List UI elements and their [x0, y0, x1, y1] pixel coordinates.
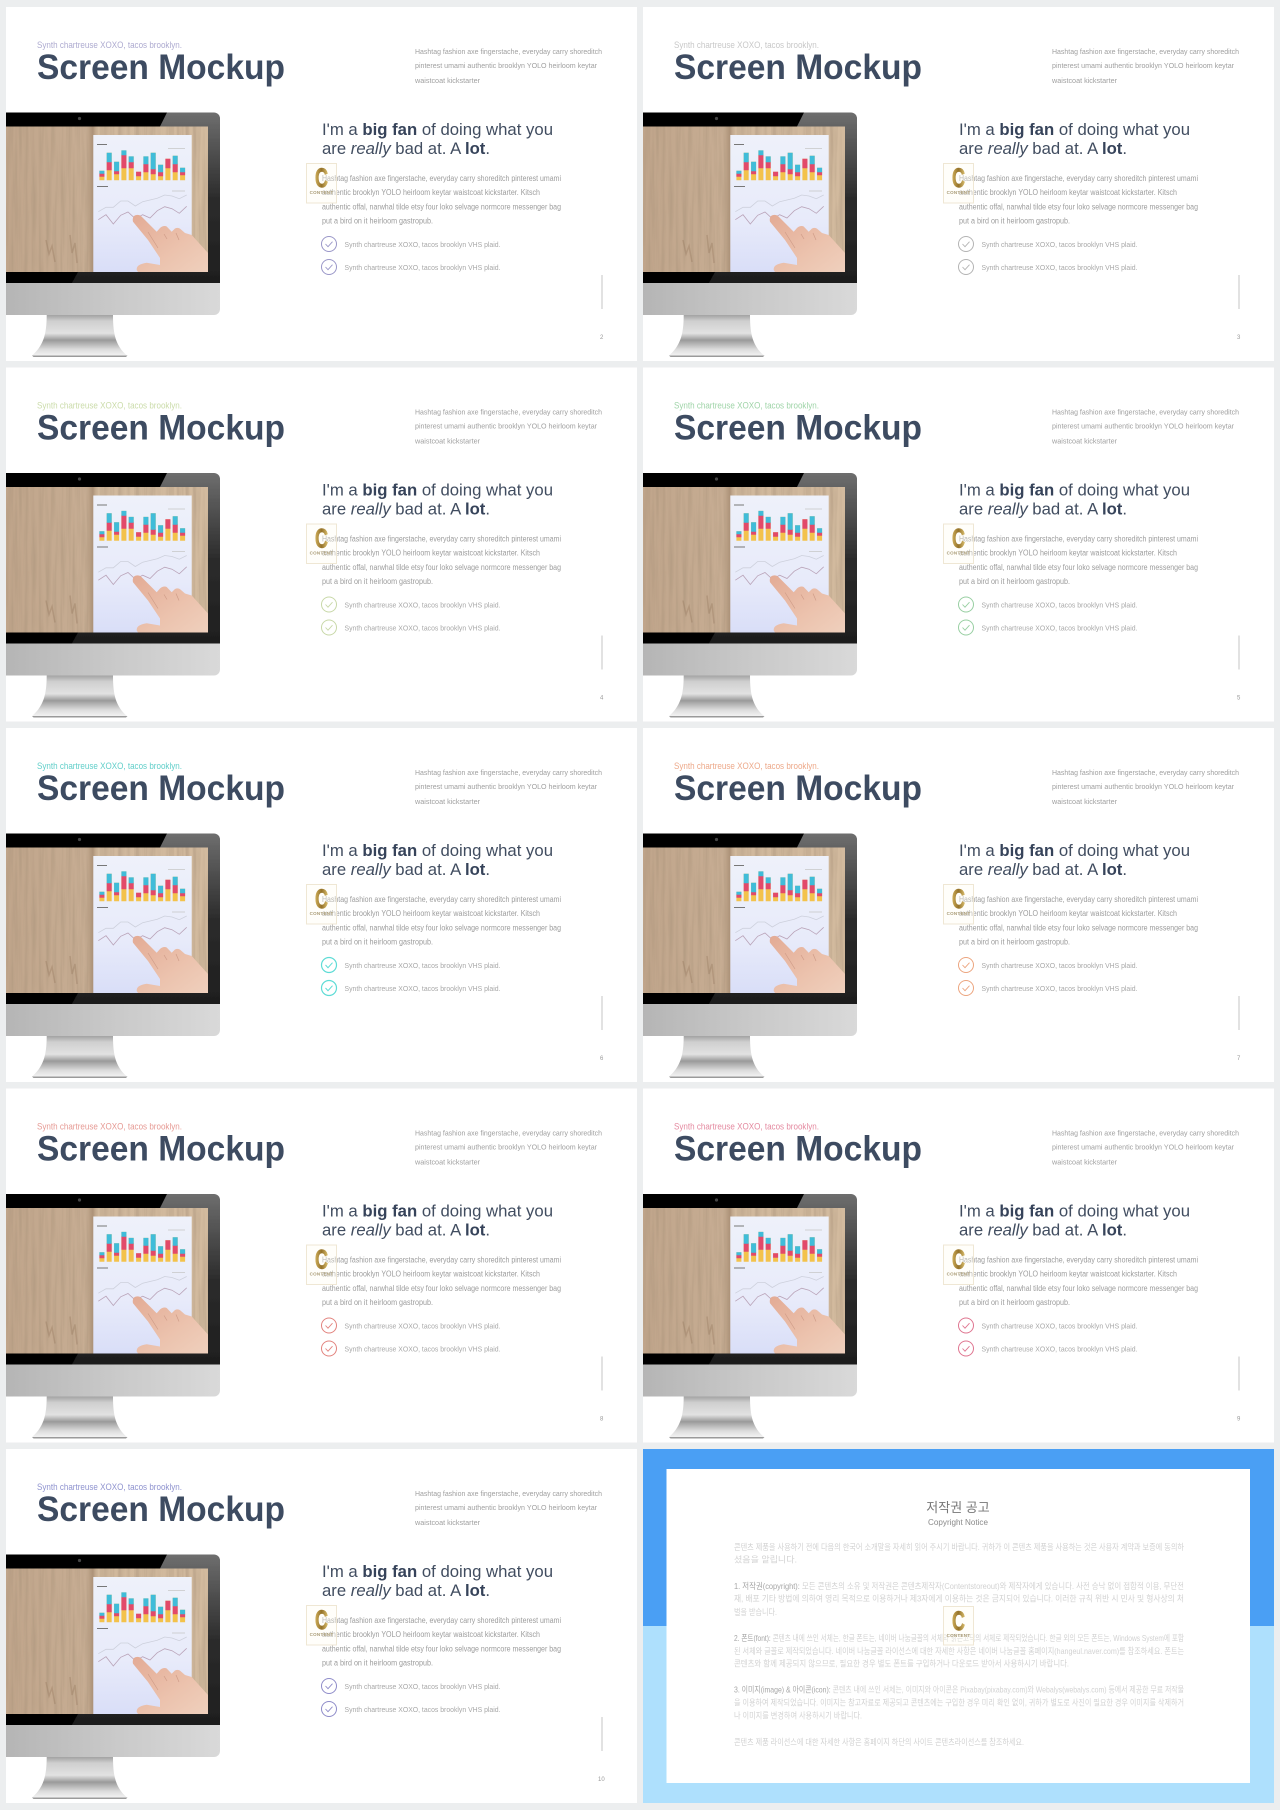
body text: put a bird on it heirloom gastropub. [322, 938, 433, 946]
intro text [1051, 47, 1239, 85]
check item 2: Synth chartreuse XOXO, tacos brooklyn VHS plaid. [982, 624, 1138, 632]
body text: Hashtag fashion axe fingerstache, everyday carry shoreditch pinterest umami [322, 1256, 561, 1264]
heading: I'm a big fan of doing what you [322, 120, 553, 139]
page number: 3 [1237, 335, 1241, 341]
notice section 3: 3. 이미지(image) & 아이콘(icon): 콘텐츠 내에 쓰인 서체는, 이미지와 아이콘은 Pixabay(pixabay.com)와 Webalys(webalys.com) 등에서 제공한 무료 저작물 [734, 1684, 1184, 1694]
subtitle: Synth chartreuse XOXO, tacos brooklyn. [674, 761, 819, 772]
watermark: CONTENT [310, 190, 333, 195]
body text: authentic brooklyn YOLO heirloom keytar waistcoat kickstarter. Kitsch [959, 909, 1177, 918]
body text [322, 895, 561, 946]
title: Screen Mockup [674, 769, 922, 808]
monitor mockup [6, 473, 220, 718]
check item 2: Synth chartreuse XOXO, tacos brooklyn VHS plaid. [344, 1705, 500, 1714]
body text: Hashtag fashion axe fingerstache, everyday carry shoreditch pinterest umami [322, 534, 561, 544]
body text [322, 1616, 561, 1668]
heading: are really bad at. A lot. [322, 500, 490, 518]
body text: authentic offal, narwhal tilde etsy four loko selvage normcore messenger bag [322, 1644, 561, 1654]
panel: slide 2 [6, 7, 637, 361]
notice section 1: 재, 배포 기타 방법에 의하여 영리 목적으로 이용하거나 제3자에게 이용하는 것은 금지되어 있습니다. 이러한 규칙 위반 시 민사 및 형사상의 처 [734, 1594, 1184, 1604]
intro text [414, 47, 602, 85]
title: Screen Mockup [37, 769, 285, 808]
page number: 5 [1237, 696, 1241, 702]
body text: Hashtag fashion axe fingerstache, everyday carry shoreditch pinterest umami [959, 174, 1198, 183]
check item 2 [958, 260, 1138, 274]
check item 2: Synth chartreuse XOXO, tacos brooklyn VHS plaid. [344, 1344, 500, 1354]
subtitle: Synth chartreuse XOXO, tacos brooklyn. [37, 1122, 182, 1132]
check item 2: Synth chartreuse XOXO, tacos brooklyn VHS plaid. [982, 984, 1138, 993]
heading [959, 1202, 1190, 1240]
watermark: C [952, 1606, 965, 1636]
title: Screen Mockup [674, 48, 922, 87]
notice section 3: 을 이용하여 제작되었습니다. 이미지는 참고자료로 제공되고 콘텐츠에는 구입한 경우 미리 확인 없이, 귀하가 별도로 사진이 필요한 경우 이미지를 삭제하거 [734, 1698, 1184, 1708]
body text: authentic offal, narwhal tilde etsy four loko selvage normcore messenger bag [322, 563, 561, 572]
heading: are really bad at. A lot. [959, 500, 1127, 518]
body text: authentic brooklyn YOLO heirloom keytar waistcoat kickstarter. Kitsch [322, 188, 540, 197]
body text: put a bird on it heirloom gastropub. [959, 938, 1070, 946]
check item 1 [322, 236, 500, 252]
title: Screen Mockup [37, 1490, 285, 1529]
monitor mockup [643, 1194, 857, 1438]
notice title: 저작권 공고 [926, 1500, 990, 1515]
body text: authentic brooklyn YOLO heirloom keytar waistcoat kickstarter. Kitsch [322, 1630, 540, 1639]
check item 1: Synth chartreuse XOXO, tacos brooklyn VHS plaid. [982, 240, 1138, 249]
light blue frame bottom [643, 1626, 1274, 1803]
panel: slide 6 [6, 728, 637, 1082]
watermark: CONTENT [947, 1272, 970, 1276]
body text: put a bird on it heirloom gastropub. [959, 1298, 1070, 1307]
body text: authentic offal, narwhal tilde etsy four loko selvage normcore messenger bag [959, 563, 1198, 572]
check item 1 [322, 958, 500, 972]
subtitle: Synth chartreuse XOXO, tacos brooklyn. [37, 1482, 182, 1493]
intro text [1051, 1128, 1239, 1166]
body text [959, 1256, 1198, 1307]
subtitle: Synth chartreuse XOXO, tacos brooklyn. [674, 40, 819, 51]
watermark: C [315, 1244, 328, 1274]
body text: Hashtag fashion axe fingerstache, everyday carry shoreditch pinterest umami [322, 895, 561, 904]
monitor mockup [6, 834, 220, 1078]
heading: I'm a big fan of doing what you [322, 841, 553, 860]
check item 1 [958, 236, 1138, 252]
body text: put a bird on it heirloom gastropub. [322, 1658, 433, 1668]
check item 2: Synth chartreuse XOXO, tacos brooklyn VHS plaid. [982, 263, 1138, 272]
watermark: CONTENT [310, 1632, 333, 1637]
heading: are really bad at. A lot. [322, 860, 490, 879]
body text: authentic brooklyn YOLO heirloom keytar waistcoat kickstarter. Kitsch [959, 548, 1177, 558]
subtitle: Synth chartreuse XOXO, tacos brooklyn. [37, 400, 182, 412]
heading [322, 480, 553, 518]
body text: authentic offal, narwhal tilde etsy four loko selvage normcore messenger bag [322, 202, 561, 212]
check item 1: Synth chartreuse XOXO, tacos brooklyn VHS plaid. [344, 240, 500, 249]
subtitle: Synth chartreuse XOXO, tacos brooklyn. [674, 400, 819, 412]
watermark: CONTENT [310, 550, 333, 556]
watermark: C [315, 163, 328, 193]
check item 2 [322, 620, 500, 635]
check item 2 [958, 1341, 1138, 1356]
intro text: pinterest umami authentic brooklyn YOLO heirloom keytar [415, 61, 597, 70]
body text: authentic brooklyn YOLO heirloom keytar waistcoat kickstarter. Kitsch [959, 188, 1177, 197]
intro text: Hashtag fashion axe fingerstache, everyday carry shoreditch [1052, 47, 1239, 56]
body text: authentic offal, narwhal tilde etsy four loko selvage normcore messenger bag [959, 924, 1198, 932]
check item 2 [958, 620, 1138, 635]
watermark: CONTENT [947, 190, 970, 195]
notice section 2: 2. 폰트(font): 콘텐츠 내에 쓰인 서체는, 한글 폰트는, 네이버 나눔글꼴의 서체와 맑은고딕의 서체로 제작되었습니다. 한글 외의 모든 폰트는, Windows System에 포함 [734, 1633, 1184, 1643]
check item 2 [322, 260, 500, 274]
watermark: C [315, 884, 328, 914]
watermark: C [315, 524, 328, 554]
body text: put a bird on it heirloom gastropub. [959, 216, 1070, 226]
body text [959, 895, 1198, 946]
notice section 1 [734, 1581, 1184, 1617]
heading [322, 1562, 553, 1600]
intro text: Hashtag fashion axe fingerstache, everyday carry shoreditch [415, 47, 602, 56]
watermark: C [952, 1244, 965, 1274]
intro text: pinterest umami authentic brooklyn YOLO heirloom keytar [1052, 61, 1234, 70]
check item 2: Synth chartreuse XOXO, tacos brooklyn VHS plaid. [344, 624, 500, 632]
heading: are really bad at. A lot. [322, 139, 490, 158]
panel: copyright notice [643, 1449, 1274, 1803]
heading: I'm a big fan of doing what you [322, 1562, 553, 1581]
heading: I'm a big fan of doing what you [959, 841, 1190, 860]
subtitle: Synth chartreuse XOXO, tacos brooklyn. [37, 761, 182, 772]
check item 1 [958, 597, 1138, 612]
body text [322, 174, 561, 226]
intro text: pinterest umami authentic brooklyn YOLO heirloom keytar [1052, 1142, 1234, 1152]
body text: Hashtag fashion axe fingerstache, everyday carry shoreditch pinterest umami [322, 1616, 561, 1625]
monitor mockup [643, 834, 857, 1078]
body text: authentic offal, narwhal tilde etsy four loko selvage normcore messenger bag [322, 924, 561, 932]
intro text: pinterest umami authentic brooklyn YOLO heirloom keytar [1052, 782, 1234, 791]
page number: 2 [600, 335, 604, 341]
monitor mockup [643, 112, 857, 357]
watermark [306, 524, 336, 564]
monitor mockup [6, 1554, 220, 1799]
heading [959, 480, 1190, 518]
heading: I'm a big fan of doing what you [959, 120, 1190, 139]
check item 1: Synth chartreuse XOXO, tacos brooklyn VHS plaid. [344, 1322, 500, 1330]
body text [322, 534, 561, 586]
check item 1 [322, 1678, 500, 1694]
notice section 3: 나 이미지를 변경하여 사용하시기 바랍니다. [734, 1710, 862, 1720]
watermark [306, 884, 336, 924]
intro text: waistcoat kickstarter [1051, 797, 1117, 806]
check item 1: Synth chartreuse XOXO, tacos brooklyn VHS plaid. [982, 1322, 1138, 1330]
panel: slide 10 [6, 1449, 637, 1803]
intro text: Hashtag fashion axe fingerstache, everyday carry shoreditch [415, 408, 602, 416]
watermark [944, 524, 974, 564]
check item 2: Synth chartreuse XOXO, tacos brooklyn VHS plaid. [344, 984, 500, 993]
notice subtitle: Copyright Notice [928, 1517, 988, 1527]
intro text: pinterest umami authentic brooklyn YOLO heirloom keytar [415, 1142, 597, 1152]
check item 2 [322, 1702, 500, 1716]
check item 2 [322, 980, 500, 996]
check item 1: Synth chartreuse XOXO, tacos brooklyn VHS plaid. [344, 1682, 500, 1691]
intro text: waistcoat kickstarter [414, 436, 480, 446]
body text: authentic brooklyn YOLO heirloom keytar waistcoat kickstarter. Kitsch [322, 1270, 540, 1278]
watermark [306, 1244, 336, 1284]
check item 1: Synth chartreuse XOXO, tacos brooklyn VHS plaid. [344, 961, 500, 970]
page number: 4 [600, 696, 604, 702]
heading [322, 841, 553, 879]
watermark [306, 1605, 336, 1645]
body text: put a bird on it heirloom gastropub. [322, 577, 433, 586]
intro text: waistcoat kickstarter [1051, 436, 1117, 446]
panel: slide 5 [643, 368, 1274, 722]
check item 1 [322, 1318, 500, 1333]
notice section 2: 된 서체와 글꼴로 제작되었습니다. 네이버 나눔글꼴 라이선스에 대한 자세한 사항은 네이버 나눔글꼴 홈페이지(hangeul.naver.com)를 참조하세요. 폰트는 [734, 1646, 1184, 1656]
check item 1 [958, 958, 1138, 972]
notice section 2: 콘텐츠와 함께 제공되지 않으므로, 필요한 경우 별도 폰트를 구입하거나 다운로드 받아서 사용하시기 바랍니다. [734, 1658, 1069, 1668]
title: Screen Mockup [674, 408, 922, 448]
intro text: waistcoat kickstarter [414, 797, 480, 806]
intro text: Hashtag fashion axe fingerstache, everyday carry shoreditch [415, 1489, 602, 1498]
monitor mockup [6, 112, 220, 357]
notice intro: 셨음을 알립니다. [734, 1554, 797, 1564]
notice section 1: 벌을 받습니다. [734, 1607, 777, 1617]
intro text [1051, 408, 1239, 446]
body text: put a bird on it heirloom gastropub. [322, 1298, 433, 1307]
intro text: Hashtag fashion axe fingerstache, everyday carry shoreditch [1052, 1128, 1239, 1138]
monitor mockup [6, 1194, 220, 1438]
watermark: CONTENT [947, 911, 970, 916]
panel: slide 3 [643, 7, 1274, 361]
page number: 9 [1237, 1416, 1241, 1422]
watermark: CONTENT [310, 1272, 333, 1276]
body text: Hashtag fashion axe fingerstache, everyday carry shoreditch pinterest umami [959, 534, 1198, 544]
intro text: Hashtag fashion axe fingerstache, everyday carry shoreditch [415, 768, 602, 777]
body text: authentic brooklyn YOLO heirloom keytar waistcoat kickstarter. Kitsch [322, 909, 540, 918]
check item 1 [322, 597, 500, 612]
heading: are really bad at. A lot. [322, 1581, 490, 1600]
check item 2: Synth chartreuse XOXO, tacos brooklyn VHS plaid. [344, 263, 500, 272]
heading: are really bad at. A lot. [959, 1220, 1127, 1240]
title: Screen Mockup [37, 1130, 285, 1168]
intro text: pinterest umami authentic brooklyn YOLO heirloom keytar [1052, 422, 1234, 430]
intro text: Hashtag fashion axe fingerstache, everyday carry shoreditch [1052, 768, 1239, 777]
watermark [306, 163, 336, 203]
notice section 2 [734, 1633, 1184, 1668]
intro text: Hashtag fashion axe fingerstache, everyday carry shoreditch [1052, 408, 1239, 416]
intro text: waistcoat kickstarter [1051, 76, 1117, 85]
heading: are really bad at. A lot. [322, 1220, 490, 1240]
notice section 1: 1. 저작권(copyright): 모든 콘텐츠의 소유 및 저작권은 콘텐츠제작자(Contentstoreout)와 제작자에게 있습니다. 사전 승낙 없이 접합적 이용, 무단전 [734, 1581, 1184, 1591]
heading [322, 120, 553, 158]
intro text: Hashtag fashion axe fingerstache, everyday carry shoreditch [415, 1128, 602, 1138]
watermark [944, 163, 974, 203]
intro text [414, 1128, 602, 1166]
notice intro: 콘텐츠 제품을 사용하기 전에 다음의 한국어 소개말을 자세히 읽어 주시기 바랍니다. 귀하가 이 콘텐츠 제품을 사용하는 것은 사용자 계약과 보증에 동의하 [734, 1542, 1184, 1552]
body text [959, 174, 1198, 226]
intro text [414, 768, 602, 806]
panel: slide 9 [643, 1088, 1274, 1442]
check item 2 [322, 1341, 500, 1356]
intro text [414, 1489, 602, 1527]
page number: 6 [600, 1056, 604, 1062]
body text: put a bird on it heirloom gastropub. [322, 216, 433, 226]
intro text [414, 408, 602, 446]
intro text: waistcoat kickstarter [1051, 1158, 1117, 1166]
panel: slide 8 [6, 1088, 637, 1442]
body text: put a bird on it heirloom gastropub. [959, 577, 1070, 586]
body text: authentic brooklyn YOLO heirloom keytar waistcoat kickstarter. Kitsch [322, 548, 540, 558]
watermark: CONTENT [310, 911, 333, 916]
watermark: C [952, 163, 965, 193]
body text: Hashtag fashion axe fingerstache, everyday carry shoreditch pinterest umami [959, 1256, 1198, 1264]
heading [959, 120, 1190, 158]
heading: I'm a big fan of doing what you [322, 1202, 553, 1220]
watermark: C [952, 524, 965, 554]
intro text: pinterest umami authentic brooklyn YOLO heirloom keytar [415, 422, 597, 430]
intro text: pinterest umami authentic brooklyn YOLO heirloom keytar [415, 1503, 597, 1512]
watermark: CONTENT [947, 550, 970, 556]
check item 1: Synth chartreuse XOXO, tacos brooklyn VHS plaid. [982, 961, 1138, 970]
blue frame top [643, 1449, 1274, 1626]
body text: Hashtag fashion axe fingerstache, everyday carry shoreditch pinterest umami [959, 895, 1198, 904]
heading: I'm a big fan of doing what you [322, 480, 553, 500]
heading: I'm a big fan of doing what you [959, 1202, 1190, 1220]
subtitle: Synth chartreuse XOXO, tacos brooklyn. [674, 1122, 819, 1132]
check item 1 [958, 1318, 1138, 1333]
page number: 7 [1237, 1056, 1241, 1062]
check item 2: Synth chartreuse XOXO, tacos brooklyn VHS plaid. [982, 1344, 1138, 1354]
subtitle: Synth chartreuse XOXO, tacos brooklyn. [37, 40, 182, 51]
watermark: C [315, 1605, 328, 1635]
panel: slide 7 [643, 728, 1274, 1082]
notice footer: 콘텐츠 제품 라이선스에 대한 자세한 사항은 홈페이지 하단의 사이트 콘텐츠라이선스를 참조하세요. [734, 1737, 1024, 1747]
body text: authentic offal, narwhal tilde etsy four loko selvage normcore messenger bag [959, 1284, 1198, 1293]
heading: are really bad at. A lot. [959, 860, 1127, 879]
watermark: CONTENT [947, 1633, 970, 1638]
notice intro [734, 1542, 1184, 1564]
notice section 3 [734, 1684, 1184, 1720]
intro text: waistcoat kickstarter [414, 76, 480, 85]
check item 1: Synth chartreuse XOXO, tacos brooklyn VHS plaid. [344, 600, 500, 610]
page number: 10 [598, 1777, 605, 1783]
body text [959, 534, 1198, 586]
body text: Hashtag fashion axe fingerstache, everyday carry shoreditch pinterest umami [322, 174, 561, 183]
watermark: C [952, 884, 965, 914]
intro text: waistcoat kickstarter [414, 1518, 480, 1527]
body text: authentic offal, narwhal tilde etsy four loko selvage normcore messenger bag [959, 202, 1198, 212]
title: Screen Mockup [674, 1130, 922, 1168]
body text: authentic offal, narwhal tilde etsy four loko selvage normcore messenger bag [322, 1284, 561, 1293]
body text [322, 1256, 561, 1307]
check item 1: Synth chartreuse XOXO, tacos brooklyn VHS plaid. [982, 600, 1138, 610]
body text: authentic brooklyn YOLO heirloom keytar waistcoat kickstarter. Kitsch [959, 1270, 1177, 1278]
monitor mockup [643, 473, 857, 718]
intro text: pinterest umami authentic brooklyn YOLO heirloom keytar [415, 782, 597, 791]
heading [322, 1202, 553, 1240]
intro text: waistcoat kickstarter [414, 1158, 480, 1166]
check item 2 [958, 980, 1138, 996]
heading: are really bad at. A lot. [959, 139, 1127, 158]
heading [959, 841, 1190, 879]
heading: I'm a big fan of doing what you [959, 480, 1190, 500]
panel: slide 4 [6, 368, 637, 722]
watermark [944, 1244, 974, 1284]
watermark [944, 884, 974, 924]
intro text [1051, 768, 1239, 806]
white card [666, 1469, 1250, 1783]
title: Screen Mockup [37, 408, 285, 448]
title: Screen Mockup [37, 48, 285, 87]
watermark [944, 1606, 974, 1645]
page number: 8 [600, 1416, 604, 1422]
